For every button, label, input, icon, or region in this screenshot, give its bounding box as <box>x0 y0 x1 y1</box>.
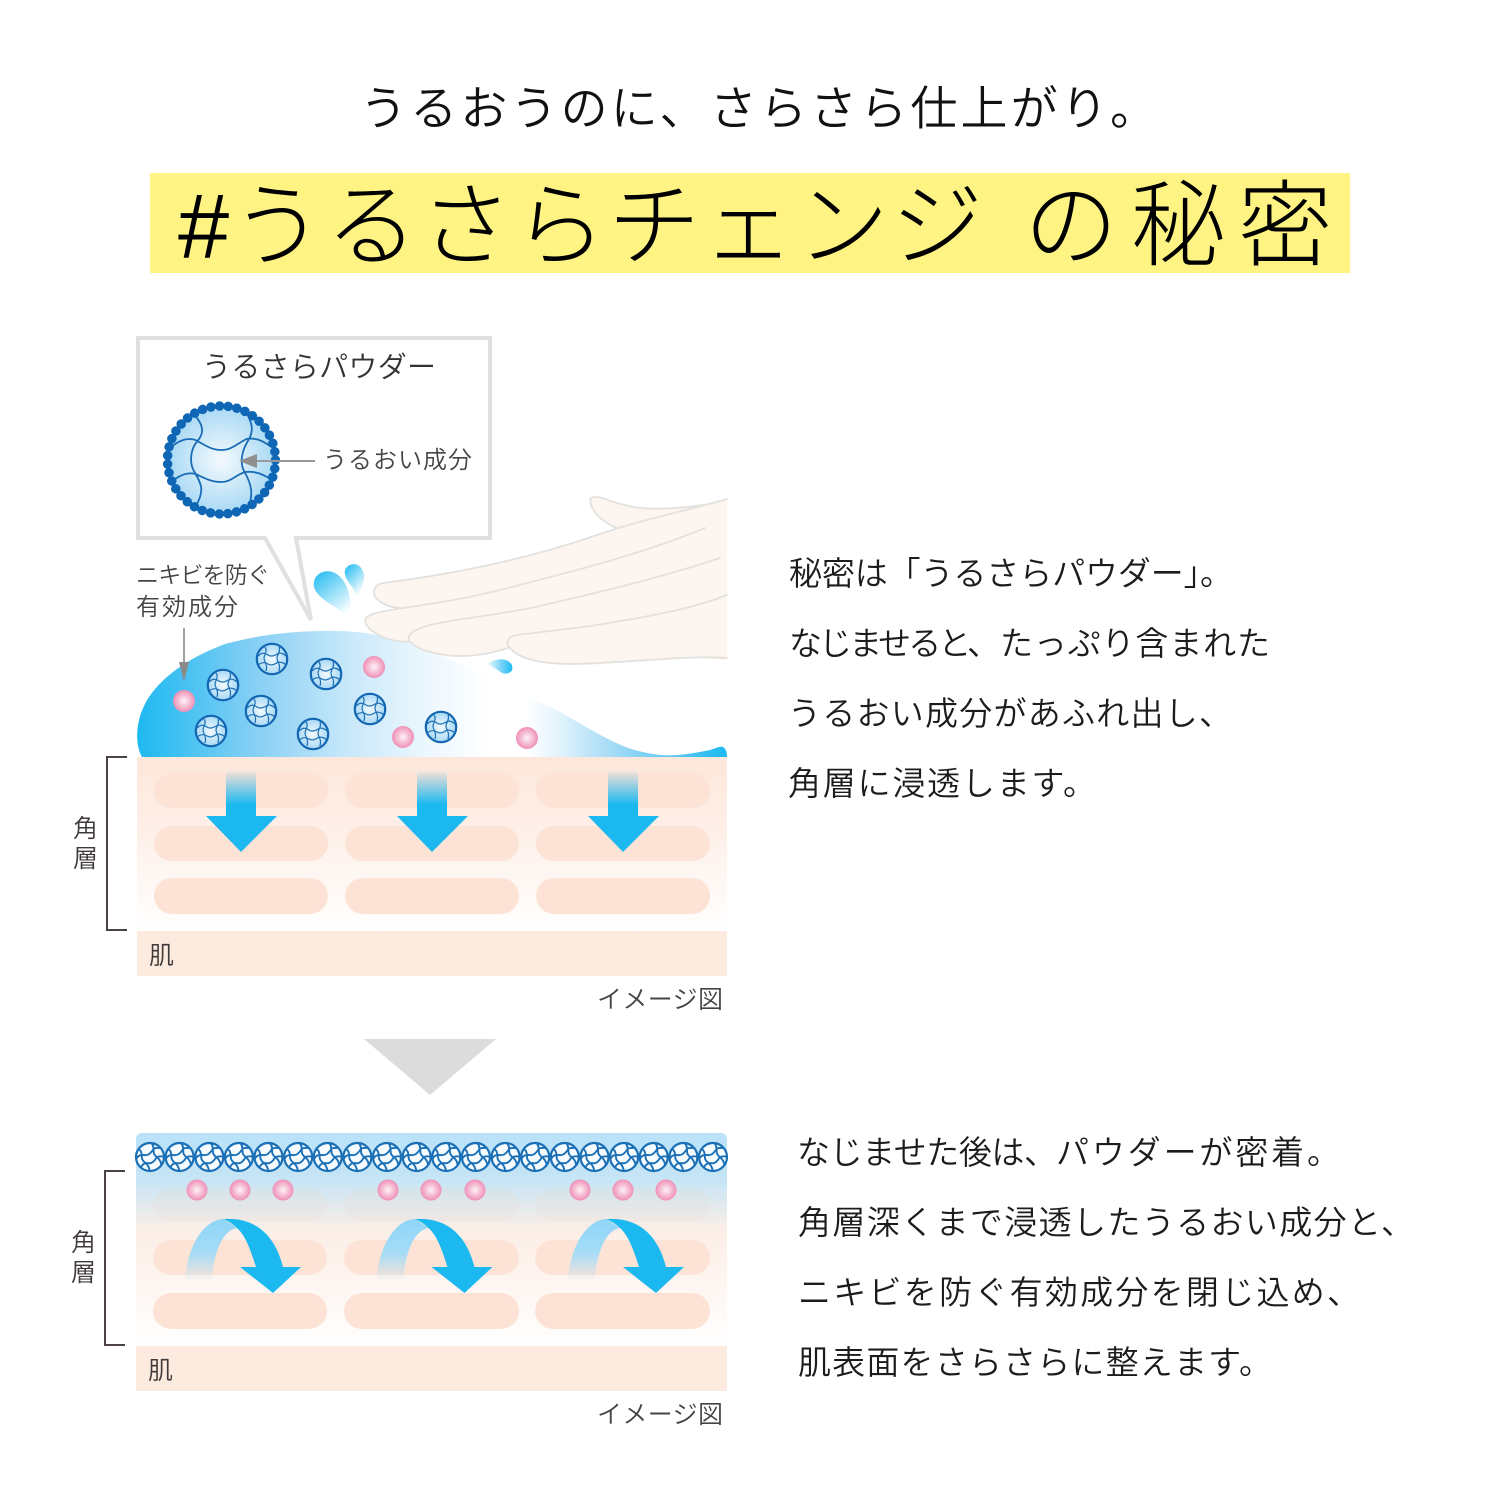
icon: powder particle <box>168 406 276 514</box>
acne prevention particles row <box>186 1180 676 1200</box>
text block: after application explanation: 肌表面をさらさらに整えます。 <box>798 1344 1272 1381</box>
title: sub heading: うるおうのに、さらさら仕上がり。 <box>360 82 1157 135</box>
panel: before diagram, skin bar <box>137 931 727 976</box>
text block: after application explanation <box>797 1134 1414 1381</box>
panel: after diagram, stratum corneum <box>136 1133 727 1346</box>
caption: image figure: イメージ図 <box>597 1401 723 1429</box>
bracket: stratum corneum label <box>73 757 127 930</box>
panel: before diagram, skin bar: 肌 <box>149 942 174 970</box>
text block: after application explanation: ニキビを防ぐ有効成分を閉じ込め、 <box>798 1274 1360 1311</box>
icon: water drops <box>314 564 512 674</box>
label: acne prevention ingredient: ニキビを防ぐ <box>136 562 270 588</box>
caption: image figure: イメージ図 <box>597 986 723 1014</box>
text block: after application explanation: パウダーが密着。 <box>1056 1134 1340 1171</box>
text block: powder explanation: たっぷり含まれた <box>1000 625 1270 662</box>
text block: after application explanation: なじませた後は、 <box>797 1134 1057 1171</box>
illustration: fingers <box>365 497 727 664</box>
label: acne prevention ingredient: 有効成分 <box>136 594 238 621</box>
text block: powder explanation: なじませると、 <box>789 625 1000 662</box>
heading: yellow banner: #うるさらチェンジ <box>178 176 983 278</box>
text block: powder explanation: 秘密は「うるさらパウダー」。 <box>789 555 1233 592</box>
illustration: liquid wave with powder <box>137 631 727 757</box>
heading: yellow banner <box>150 173 1350 278</box>
callout: uru-sara powder: うるおい成分 <box>323 447 472 474</box>
callout: uru-sara powder: うるさらパウダー <box>202 351 436 384</box>
bracket: stratum corneum label <box>71 1171 125 1345</box>
arrows: powder penetrating downward <box>206 770 659 852</box>
arrow: moisture pointer <box>239 454 315 468</box>
text block: powder explanation <box>788 555 1270 802</box>
text block: powder explanation: 角層に浸透します。 <box>788 765 1096 802</box>
bracket: stratum corneum label: 角 <box>73 815 98 843</box>
bracket: stratum corneum label: 角 <box>71 1229 96 1257</box>
heading: yellow banner: の秘密 <box>1024 173 1332 278</box>
acne prevention particles <box>173 656 538 749</box>
powder particles <box>196 644 456 749</box>
text block: powder explanation: うるおい成分があふれ出し、 <box>788 695 1232 732</box>
bracket: stratum corneum label: 層 <box>71 1259 96 1287</box>
arrows: curved lock-in <box>185 1219 684 1293</box>
panel: after diagram, skin bar <box>136 1346 727 1391</box>
text block: after application explanation: 角層深くまで浸透したうるおい成分と、 <box>798 1204 1414 1241</box>
label: acne prevention ingredient <box>136 562 270 682</box>
arrow: transition triangle <box>364 1039 496 1095</box>
callout: uru-sara powder <box>138 338 490 620</box>
bracket: stratum corneum label: 層 <box>73 845 98 873</box>
powder layer on skin surface <box>133 1141 730 1173</box>
panel: after diagram, skin bar: 肌 <box>148 1357 173 1385</box>
panel: before diagram, stratum corneum <box>137 757 727 931</box>
